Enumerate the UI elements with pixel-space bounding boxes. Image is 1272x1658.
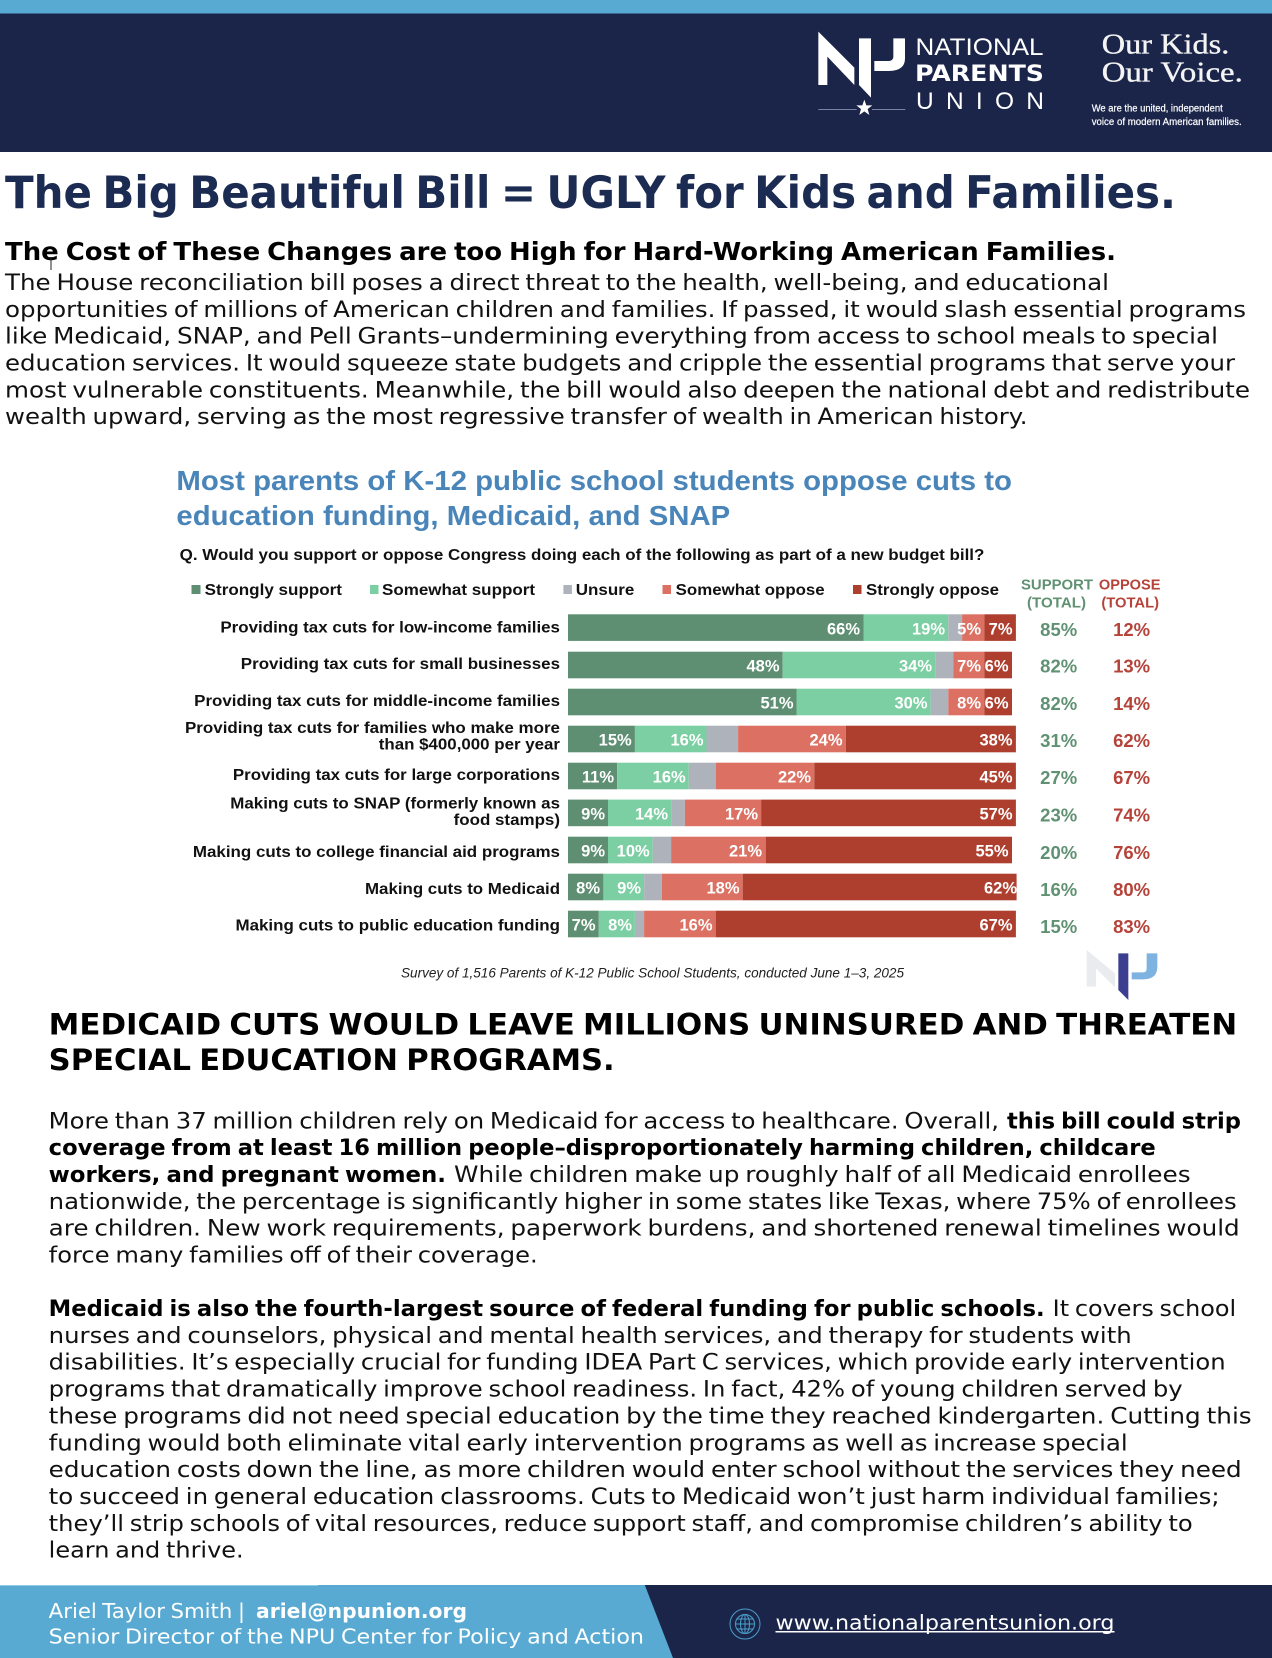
contact details — [49, 1599, 644, 1648]
row: tax cuts for families over $400,000: 24% — [809, 732, 843, 750]
row: cuts to Medicaid: 80% — [1113, 879, 1150, 900]
legend: Strongly oppose — [866, 582, 999, 599]
subheading: The Cost of These Changes are too High for Hard-Working American Families. — [5, 237, 1116, 266]
row: cuts to college financial aid: 76% — [1113, 842, 1150, 863]
icon: small NP watermark logo — [1087, 950, 1157, 1000]
row: cuts to Medicaid: 18% — [706, 880, 740, 898]
text block: Medicaid coverage paragraph — [49, 1109, 1241, 1268]
section heading: Medicaid cuts: SPECIAL EDUCATION PROGRAMS. — [49, 1043, 615, 1077]
slogan: Our Kids. — [1102, 29, 1229, 60]
row: cuts to college financial aid — [193, 837, 1150, 863]
legend — [192, 582, 999, 599]
text block: school funding paragraph: to succeed in general education classrooms. Cuts to Medicaid won’t just harm individual families; — [49, 1485, 1220, 1510]
row: tax cuts for small businesses: Providing tax cuts for small businesses — [241, 656, 560, 673]
text block: school funding paragraph: programs that dramatically improve school readiness. In fact, 42% of young children served by — [49, 1378, 1183, 1403]
text block: school funding paragraph: funding would both eliminate vital early intervention programs as well as increase special — [49, 1431, 1128, 1456]
slogan: Our Voice. — [1102, 58, 1243, 89]
row: tax cuts for small businesses: 82% — [1040, 656, 1077, 677]
text block: Medicaid coverage paragraph: nationwide, the percentage is significantly higher in some states like Texas, where 75% of enrollees — [49, 1190, 1237, 1215]
row: cuts to SNAP: 14% — [635, 806, 668, 824]
text block: introduction — [4, 271, 1250, 430]
totals column headers: SUPPORT — [1021, 577, 1093, 593]
totals column headers: (TOTAL) — [1027, 596, 1086, 612]
row: cuts to SNAP: 23% — [1040, 805, 1077, 826]
text block: Medicaid coverage paragraph: workers, and pregnant women. — [49, 1163, 446, 1188]
row: cuts to SNAP: 57% — [979, 806, 1013, 824]
text block: school funding paragraph — [49, 1297, 1252, 1564]
text block: introduction: wealth upward, serving as the most regressive transfer of wealth in American history. — [5, 405, 1028, 430]
row: cuts to public education funding: 8% — [608, 917, 632, 935]
row: cuts to college financial aid: 21% — [729, 843, 762, 861]
contact details: Senior Director of the NPU Center for Policy and Action — [49, 1624, 644, 1648]
legend: Strongly support — [205, 582, 342, 599]
legend: Unsure — [576, 582, 635, 599]
row: tax cuts for middle-income families: 30% — [894, 695, 928, 713]
row: tax cuts for families over $400,000: 38% — [979, 732, 1013, 750]
row: cuts to SNAP: Making cuts to SNAP (formerly known as — [230, 796, 560, 813]
title: The Big Beautiful Bill = UGLY for Kids and Families. — [5, 168, 1176, 219]
row: tax cuts for low-income families: 85% — [1040, 619, 1077, 640]
row: cuts to public education funding: Making cuts to public education funding — [236, 918, 560, 935]
row: cuts to Medicaid: 9% — [617, 880, 641, 898]
text block: Medicaid coverage paragraph: this bill could strip — [1007, 1109, 1241, 1134]
row: cuts to SNAP: 9% — [581, 806, 605, 824]
text block: introduction: like Medicaid, SNAP, and Pell Grants–undermining everything from access to school meals to special — [5, 325, 1218, 350]
totals column headers — [1021, 577, 1161, 612]
row: tax cuts for small businesses: 6% — [985, 658, 1009, 676]
text block: school funding paragraph: It covers school — [1053, 1297, 1236, 1322]
row: cuts to SNAP: food stamps) — [454, 812, 560, 829]
row: cuts to public education funding: 7% — [572, 917, 596, 935]
row: tax cuts for small businesses: 48% — [746, 658, 780, 676]
row: tax cuts for small businesses: 34% — [899, 658, 932, 676]
row: tax cuts for middle-income families: 8% — [957, 695, 981, 713]
logo wordmark — [915, 34, 1044, 115]
row: cuts to Medicaid: Making cuts to Medicaid — [365, 881, 560, 898]
row: tax cuts for large corporations: 16% — [653, 769, 686, 787]
row: tax cuts for middle-income families: 14% — [1113, 693, 1150, 714]
text block: Medicaid coverage paragraph: More than 37 million children rely on Medicaid for access to healthcare. Overall, — [49, 1109, 999, 1134]
survey source note: Survey of 1,516 Parents of K-12 Public School Students, conducted June 1–3, 2025 — [401, 966, 904, 981]
chart title — [176, 465, 1012, 531]
row: tax cuts for middle-income families: 6% — [985, 695, 1009, 713]
text block: school funding paragraph: education costs down the line, as more children would enter school without the services they need — [49, 1458, 1242, 1483]
row: tax cuts for families over $400,000: Providing tax cuts for families who make more — [185, 720, 560, 737]
text block: Medicaid coverage paragraph: force many families off of their coverage. — [49, 1244, 538, 1268]
row: cuts to Medicaid: 8% — [576, 880, 600, 898]
row: tax cuts for middle-income families: Providing tax cuts for middle-income families — [194, 693, 560, 710]
row: tax cuts for large corporations: Providing tax cuts for large corporations — [233, 767, 560, 784]
text block: school funding paragraph: Medicaid is also the fourth-largest source of federal funding for public schools. — [49, 1297, 1045, 1322]
row: cuts to college financial aid: Making cuts to college financial aid programs — [193, 844, 560, 861]
text block: school funding paragraph: they’ll strip schools of vital resources, reduce support staff, and compromise children’s ability to — [49, 1512, 1193, 1537]
survey question: Q. Would you support or oppose Congress doing each of the following as part of a new budget bill? — [180, 547, 984, 564]
text block: introduction: opportunities of millions of American children and families. If passed, it would slash essential programs — [5, 298, 1246, 323]
row: tax cuts for low-income families: 19% — [912, 620, 945, 638]
tagline: We are the united, independent — [1092, 104, 1223, 115]
row: cuts to public education funding: 15% — [1040, 916, 1077, 937]
logo wordmark: PARENTS — [915, 61, 1044, 87]
text block: Medicaid coverage paragraph: coverage from at least 16 million people–disproportionately harming children, childcare — [49, 1136, 1156, 1161]
row: tax cuts for families over $400,000: 62% — [1113, 730, 1150, 751]
text block: school funding paragraph: disabilities. It’s especially crucial for funding IDEA Part C services, which provide early intervention — [49, 1351, 1226, 1376]
row: tax cuts for middle-income families — [194, 689, 1150, 715]
row: tax cuts for low-income families — [220, 614, 1150, 641]
row: tax cuts for large corporations: 27% — [1040, 767, 1077, 788]
logo wordmark: UNION — [916, 88, 1044, 115]
row: cuts to public education funding: 67% — [979, 917, 1013, 935]
text block: Medicaid coverage paragraph: are children. New work requirements, paperwork burdens, and shortened renewal timelines would — [49, 1217, 1240, 1242]
row: tax cuts for small businesses: 13% — [1113, 656, 1150, 677]
row: cuts to SNAP: 17% — [725, 806, 758, 824]
legend: Somewhat oppose — [676, 582, 825, 599]
logo wordmark: NATIONAL — [916, 34, 1044, 61]
row: tax cuts for families over $400,000: 31% — [1040, 730, 1077, 751]
footer — [0, 1585, 1272, 1658]
icon: National Parents Union logo mark — [818, 32, 905, 115]
row: tax cuts for families over $400,000 — [185, 720, 1150, 754]
contact details: ariel@npunion.org — [256, 1599, 467, 1623]
row: cuts to public education funding: 16% — [679, 917, 713, 935]
row: tax cuts for families over $400,000: 16% — [670, 732, 704, 750]
row: cuts to college financial aid: 10% — [617, 843, 650, 861]
row: tax cuts for large corporations — [233, 763, 1150, 789]
stacked bar chart — [185, 614, 1150, 937]
row: tax cuts for small businesses — [241, 652, 1150, 678]
row: tax cuts for families over $400,000: than $400,000 per year — [379, 736, 560, 754]
chart title: Most parents of K-12 public school students oppose cuts to — [176, 465, 1012, 496]
header banner — [0, 0, 1272, 152]
row: tax cuts for large corporations: 45% — [979, 769, 1013, 787]
row: tax cuts for low-income families: Providing tax cuts for low-income families — [220, 620, 560, 637]
row: tax cuts for low-income families: 7% — [989, 620, 1013, 638]
slogan — [1102, 29, 1243, 89]
row: tax cuts for low-income families: 12% — [1113, 619, 1150, 640]
tagline: voice of modern American families. — [1092, 117, 1242, 128]
text cursor mark — [48, 258, 54, 270]
text block: school funding paragraph: learn and thrive. — [49, 1539, 244, 1564]
row: tax cuts for middle-income families: 82% — [1040, 693, 1077, 714]
row: tax cuts for middle-income families: 51% — [760, 695, 794, 713]
icon: globe — [730, 1609, 760, 1639]
totals column headers: (TOTAL) — [1101, 596, 1159, 612]
legend: Somewhat support — [382, 582, 535, 599]
row: tax cuts for families over $400,000: 15% — [599, 732, 632, 750]
text block: school funding paragraph: these programs did not need special education by the time they reached kindergarten. Cutting this — [49, 1404, 1252, 1429]
row: cuts to college financial aid: 9% — [581, 843, 605, 861]
row: cuts to Medicaid: 62% — [984, 880, 1017, 898]
row: cuts to college financial aid: 20% — [1040, 842, 1077, 863]
section heading: Medicaid cuts: MEDICAID CUTS WOULD LEAVE MILLIONS UNINSURED AND THREATEN — [49, 1007, 1237, 1041]
row: tax cuts for small businesses: 7% — [957, 658, 981, 676]
text block: school funding paragraph: nurses and counselors, physical and mental health services, and therapy for students with — [49, 1324, 1132, 1349]
row: tax cuts for low-income families: 5% — [957, 620, 981, 638]
row: tax cuts for large corporations: 67% — [1113, 767, 1150, 788]
totals column headers: OPPOSE — [1099, 577, 1161, 593]
text block: Medicaid coverage paragraph: While children make up roughly half of all Medicaid enrollees — [454, 1163, 1191, 1188]
chart title: education funding, Medicaid, and SNAP — [176, 500, 730, 531]
text block: introduction: most vulnerable constituents. Meanwhile, the bill would also deepen the national debt and redistribute — [5, 378, 1250, 404]
row: cuts to Medicaid: 16% — [1040, 879, 1077, 900]
row: tax cuts for large corporations: 22% — [778, 769, 811, 787]
text block: introduction: The House reconciliation bill poses a direct threat to the health, well-being, and educational — [4, 271, 1109, 296]
row: tax cuts for large corporations: 11% — [582, 769, 614, 787]
section heading: Medicaid cuts — [49, 1007, 1237, 1077]
contact details: Ariel Taylor Smith | — [49, 1599, 245, 1623]
row: cuts to college financial aid: 55% — [975, 843, 1009, 861]
tagline — [1092, 104, 1242, 128]
website link: www.nationalparentsunion.org — [776, 1610, 1114, 1634]
row: cuts to SNAP: 74% — [1113, 805, 1150, 826]
row: cuts to public education funding: 83% — [1113, 916, 1150, 937]
row: tax cuts for low-income families: 66% — [827, 620, 860, 638]
row: cuts to SNAP — [230, 796, 1150, 829]
text block: introduction: education services. It would squeeze state budgets and cripple the essential programs that serve your — [5, 352, 1236, 376]
row: cuts to public education funding — [236, 911, 1150, 937]
row: cuts to Medicaid — [365, 874, 1150, 900]
